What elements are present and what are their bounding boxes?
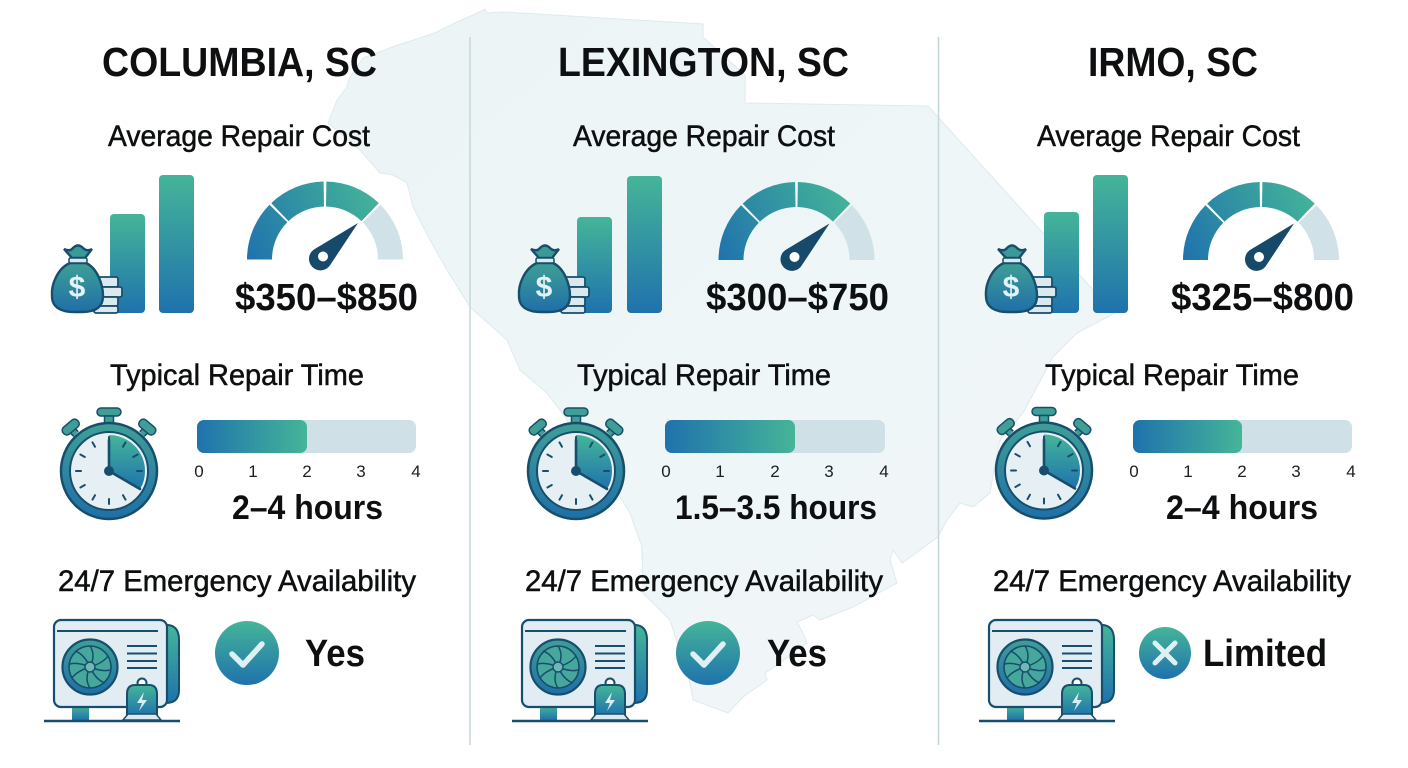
axis: hours: 0 <box>661 462 671 481</box>
label: typical repair time: Typical Repair Time <box>577 359 831 392</box>
icon: stopwatch <box>528 408 624 519</box>
axis: hours <box>661 462 889 481</box>
column divider left <box>469 37 471 745</box>
icon: air conditioner <box>512 620 648 721</box>
icon: money bag: $ <box>69 271 86 304</box>
label: average repair cost: Average Repair Cost <box>108 120 370 153</box>
icon: check <box>215 621 279 685</box>
icon: money bag <box>52 246 122 313</box>
label: typical repair time: Typical Repair Time <box>1045 359 1299 392</box>
axis: hours: 0 <box>194 462 204 481</box>
value: cost range: $325–$800 <box>1171 277 1354 319</box>
icon: cross <box>1139 627 1191 679</box>
axis: hours: 0 <box>1129 462 1139 481</box>
bar chart: cost <box>577 176 662 313</box>
icon: air conditioner <box>44 620 180 721</box>
axis: hours: 1 <box>248 462 258 481</box>
axis: hours <box>194 462 421 481</box>
icon: money bag: $ <box>536 271 553 304</box>
axis: hours <box>1129 462 1356 481</box>
heading: Lexington: LEXINGTON, SC <box>558 39 849 85</box>
icon: air conditioner <box>979 620 1115 721</box>
icon: check <box>676 621 740 685</box>
value: cost range: $350–$850 <box>235 277 418 319</box>
label: emergency availability: 24/7 Emergency Availability <box>58 565 416 598</box>
axis: hours: 2 <box>770 462 780 481</box>
value: repair time: 2–4 hours <box>232 489 383 527</box>
axis: hours: 2 <box>302 462 312 481</box>
progress bar: time <box>1133 420 1352 453</box>
heading: Irmo: IRMO, SC <box>1088 39 1258 85</box>
label: typical repair time: Typical Repair Time <box>110 359 364 392</box>
label: emergency availability: 24/7 Emergency Availability <box>525 565 883 598</box>
column divider right <box>938 37 940 745</box>
label: average repair cost: Average Repair Cost <box>1037 120 1300 153</box>
axis: hours: 3 <box>1291 462 1301 481</box>
panel: Lexington <box>512 39 889 721</box>
value: repair time: 2–4 hours <box>1166 489 1318 527</box>
heading: Columbia: COLUMBIA, SC <box>102 39 377 85</box>
axis: hours: 4 <box>411 462 421 481</box>
icon: money bag <box>986 246 1056 313</box>
value: availability: Yes <box>767 633 827 675</box>
icon: money bag <box>519 246 589 313</box>
icon: stopwatch <box>996 408 1092 518</box>
axis: hours: 1 <box>715 462 725 481</box>
gauge: cost <box>247 182 403 270</box>
icon: money bag: $ <box>1003 271 1020 304</box>
axis: hours: 3 <box>356 462 366 481</box>
background map of South Carolina <box>328 9 1117 713</box>
progress bar: time <box>197 420 416 453</box>
value: availability: Yes <box>305 633 365 675</box>
value: repair time: 1.5–3.5 hours <box>675 489 877 527</box>
icon: stopwatch <box>61 408 157 519</box>
axis: hours: 3 <box>824 462 834 481</box>
value: availability: Limited <box>1203 633 1327 675</box>
panel: Irmo <box>979 39 1356 721</box>
gauge: cost <box>1183 182 1339 271</box>
axis: hours: 4 <box>879 462 889 481</box>
gauge: cost <box>718 182 874 271</box>
axis: hours: 1 <box>1183 462 1193 481</box>
progress bar: time <box>665 420 885 453</box>
bar chart: cost <box>1044 175 1128 313</box>
bar chart: cost <box>110 175 194 313</box>
label: emergency availability: 24/7 Emergency Availability <box>993 565 1351 598</box>
axis: hours: 2 <box>1237 462 1247 481</box>
label: average repair cost: Average Repair Cost <box>573 120 835 153</box>
panel: Columbia <box>44 39 421 721</box>
axis: hours: 4 <box>1346 462 1356 481</box>
value: cost range: $300–$750 <box>706 277 889 319</box>
